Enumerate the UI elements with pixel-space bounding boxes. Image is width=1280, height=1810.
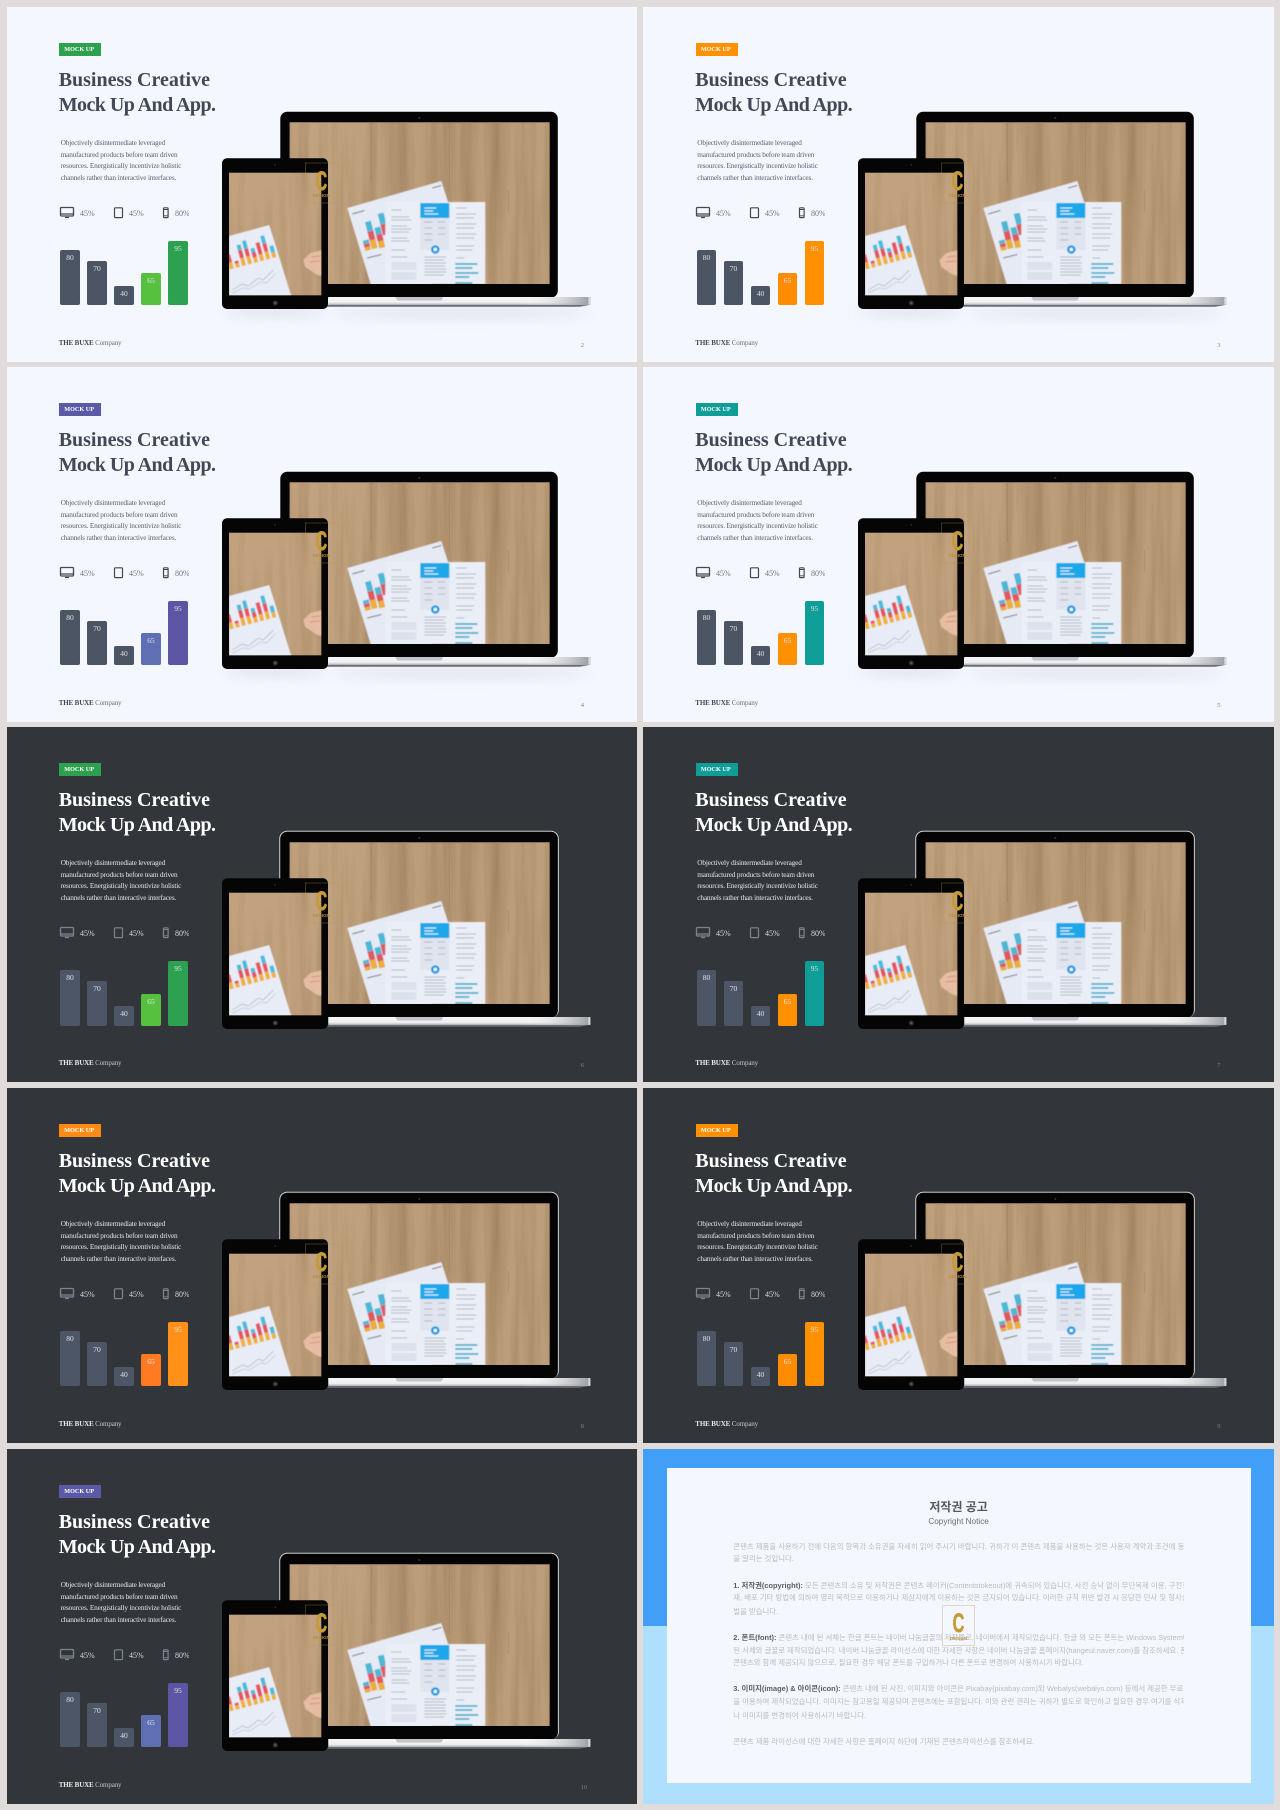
tag: MOCK UP bbox=[701, 766, 731, 773]
bar chart: 80 bbox=[66, 1334, 74, 1343]
device share icons: 45% bbox=[129, 1290, 144, 1299]
title: Business Creative bbox=[59, 69, 210, 91]
text block: channels rather than interactive interfaces. bbox=[61, 533, 176, 542]
title: Business Creative bbox=[59, 1150, 210, 1172]
tag: MOCK UP bbox=[64, 1488, 94, 1494]
device share icons bbox=[59, 1647, 189, 1663]
title bbox=[59, 1510, 216, 1560]
notice text: image and icon: 나 이미지를 변경하여 사용하시기 바랍니다. bbox=[733, 1711, 866, 1720]
tag: MOCK UP bbox=[701, 406, 731, 413]
bar chart: 95 bbox=[811, 244, 818, 253]
text block: Objectively disintermediate leveraged bbox=[61, 858, 165, 867]
text block bbox=[697, 498, 818, 542]
text block bbox=[61, 1579, 181, 1625]
bar chart: 80 bbox=[703, 613, 710, 622]
device mockup: laptop and tablet bbox=[222, 830, 590, 1029]
footer brand: THE BUXE Company bbox=[59, 1781, 121, 1789]
bar chart bbox=[7, 1318, 207, 1388]
notice heading: 저작권 공고 bbox=[929, 1500, 988, 1514]
bar chart: 65 bbox=[147, 276, 155, 285]
notice text: font bbox=[643, 1449, 1274, 1673]
panel: slide 8 dark orange-red bbox=[7, 1088, 637, 1442]
device share icons: 45% bbox=[129, 929, 144, 938]
bar chart: 40 bbox=[757, 1370, 764, 1379]
text block: resources. Energistically incentivize holistic bbox=[61, 1603, 181, 1612]
title: Mock Up And App. bbox=[59, 454, 216, 476]
title: Mock Up And App. bbox=[695, 94, 852, 116]
tag bbox=[59, 1484, 101, 1498]
tag: MOCK UP bbox=[701, 46, 731, 52]
tag: MOCK UP bbox=[64, 406, 94, 413]
text block: Objectively disintermediate leveraged bbox=[697, 138, 802, 147]
notice text: closing: 콘텐츠 제품 라이선스에 대한 자세한 사항은 홈페이지 하단에 기재된 콘텐츠라이선스를 참조하세요. bbox=[733, 1737, 1035, 1746]
bar chart: 40 bbox=[120, 649, 128, 658]
title: Business Creative bbox=[695, 789, 847, 811]
notice subheading: Copyright Notice bbox=[928, 1517, 989, 1526]
title: Mock Up And App. bbox=[59, 814, 216, 836]
footer brand: THE BUXE Company bbox=[695, 1059, 758, 1067]
bar chart: 65 bbox=[147, 636, 155, 645]
bar chart: 80 bbox=[66, 613, 74, 622]
tag bbox=[696, 763, 738, 776]
panel: slide 7 dark teal bbox=[643, 727, 1274, 1082]
text block: manufactured products before team driven bbox=[61, 870, 177, 879]
device mockup: laptop and tablet bbox=[222, 112, 590, 320]
panel: slide 6 dark green bbox=[7, 727, 637, 1082]
tag: MOCK UP bbox=[701, 1126, 731, 1134]
page number: 4 bbox=[581, 702, 584, 709]
text block: resources. Energistically incentivize holistic bbox=[697, 521, 818, 530]
text block: manufactured products before team driven bbox=[61, 1592, 177, 1600]
footer brand: THE BUXE Company bbox=[59, 339, 121, 347]
device share icons bbox=[695, 1286, 825, 1302]
footer brand: THE BUXE Company bbox=[695, 339, 758, 347]
bar chart: 80 bbox=[66, 1695, 74, 1704]
device share icons: 45% bbox=[80, 209, 95, 218]
bar chart bbox=[7, 1679, 207, 1749]
title: Mock Up And App. bbox=[59, 94, 216, 116]
page number: 3 bbox=[1217, 342, 1221, 349]
bar chart: 95 bbox=[811, 604, 818, 613]
device mockup: laptop and tablet bbox=[7, 1449, 638, 1804]
text block: manufactured products before team driven bbox=[697, 510, 814, 519]
device share icons: 45% bbox=[80, 1290, 95, 1299]
text block bbox=[60, 138, 182, 182]
bar chart: 80 bbox=[703, 973, 710, 982]
device share icons: 45% bbox=[765, 209, 780, 218]
bar chart bbox=[697, 961, 824, 1026]
page number: 7 bbox=[1217, 1062, 1221, 1069]
notice text: font: 콘텐츠와 함께 제공되지 않으므로, 필요한 경우 해당 폰트를 구입하거나 다른 폰트로 변경하여 사용하시기 바랍니다. bbox=[733, 1658, 1084, 1667]
bar chart: 65 bbox=[147, 1718, 155, 1727]
device share icons: 45% bbox=[716, 1290, 731, 1299]
text block: Objectively disintermediate leveraged bbox=[61, 1580, 165, 1589]
notice text: copyright: 벌을 받습니다. bbox=[733, 1607, 778, 1616]
device share icons: 45% bbox=[80, 929, 95, 938]
title: Business Creative bbox=[59, 1511, 210, 1533]
footer brand: THE BUXE Company bbox=[59, 699, 121, 707]
panel: slide 5 light teal bbox=[643, 367, 1274, 722]
bar chart: 65 bbox=[147, 1357, 155, 1366]
text block: resources. Energistically incentivize holistic bbox=[61, 881, 181, 890]
text block: manufactured products before team driven bbox=[61, 1230, 177, 1240]
tag bbox=[59, 42, 101, 56]
bar chart: 95 bbox=[811, 964, 818, 973]
text block: channels rather than interactive interfaces. bbox=[697, 172, 813, 182]
bar chart: 40 bbox=[757, 289, 764, 298]
text block: manufactured products before team driven bbox=[697, 870, 814, 879]
panel: slide 3 light orange bbox=[643, 7, 1274, 362]
bar chart: 70 bbox=[93, 264, 101, 273]
text block: channels rather than interactive interfaces. bbox=[61, 893, 176, 902]
device mockup: laptop and tablet bbox=[858, 112, 1226, 320]
bar chart bbox=[643, 1318, 843, 1388]
bar chart: 40 bbox=[120, 289, 128, 298]
blue upper band bbox=[643, 1449, 1274, 1626]
device share icons bbox=[60, 1288, 189, 1300]
bar chart: 65 bbox=[147, 997, 155, 1006]
text block: channels rather than interactive interfaces. bbox=[61, 172, 176, 182]
footer brand: THE BUXE Company bbox=[695, 1420, 758, 1428]
text block: Objectively disintermediate leveraged bbox=[61, 1219, 165, 1228]
title bbox=[59, 69, 216, 116]
text block: Objectively disintermediate leveraged bbox=[697, 858, 802, 867]
bar chart: 80 bbox=[703, 1334, 710, 1343]
text block: manufactured products before team driven bbox=[61, 510, 177, 519]
title: Mock Up And App. bbox=[59, 1536, 216, 1558]
title bbox=[59, 1150, 216, 1197]
text block: manufactured products before team driven bbox=[697, 1230, 814, 1240]
watermark logo: DESIGN bbox=[950, 1636, 967, 1641]
device share icons bbox=[696, 926, 825, 938]
text block bbox=[60, 498, 182, 542]
text block: resources. Energistically incentivize holistic bbox=[697, 161, 818, 170]
text block: resources. Energistically incentivize holistic bbox=[61, 521, 181, 530]
title: Mock Up And App. bbox=[695, 1175, 852, 1197]
bar chart bbox=[697, 601, 824, 665]
bar chart: 95 bbox=[174, 604, 182, 613]
notice card bbox=[667, 1468, 1251, 1783]
bar chart: 95 bbox=[811, 1325, 818, 1334]
text block: channels rather than interactive interfaces. bbox=[61, 1614, 176, 1624]
watermark logo: C bbox=[953, 1608, 965, 1638]
bar chart: 40 bbox=[120, 1370, 128, 1379]
device share icons: 45% bbox=[716, 929, 731, 938]
text block bbox=[60, 1219, 182, 1262]
text block: resources. Energistically incentivize holistic bbox=[697, 1242, 818, 1251]
device share icons bbox=[60, 926, 189, 938]
bar chart: 70 bbox=[730, 264, 737, 273]
page number: 5 bbox=[1217, 702, 1221, 709]
bar chart: 80 bbox=[66, 253, 74, 262]
panel: slide 2 light green bbox=[7, 7, 637, 362]
title bbox=[695, 789, 852, 836]
title bbox=[59, 429, 216, 476]
text block: Objectively disintermediate leveraged bbox=[61, 498, 165, 507]
text block bbox=[697, 138, 818, 182]
device share icons bbox=[60, 566, 189, 578]
footer brand: THE BUXE Company bbox=[59, 1420, 121, 1428]
text block: Objectively disintermediate leveraged bbox=[697, 1219, 802, 1228]
title: Mock Up And App. bbox=[695, 814, 852, 836]
tag bbox=[696, 1124, 738, 1137]
bar chart: 40 bbox=[757, 649, 764, 658]
device share icons: 45% bbox=[129, 1651, 144, 1660]
device share icons: 45% bbox=[129, 569, 144, 578]
watermark logo bbox=[942, 1605, 975, 1646]
bar chart: 40 bbox=[120, 1731, 128, 1740]
bar chart: 80 bbox=[703, 253, 710, 262]
bar chart: 65 bbox=[784, 1357, 791, 1366]
title: Mock Up And App. bbox=[695, 454, 852, 476]
device mockup: laptop and tablet bbox=[858, 472, 1226, 680]
tag: MOCK UP bbox=[64, 766, 94, 773]
bar chart: 40 bbox=[120, 1009, 128, 1018]
panel: slide 10 dark purple bbox=[7, 1449, 637, 1804]
tag bbox=[696, 42, 738, 56]
bar chart bbox=[60, 961, 188, 1026]
device share icons: 45% bbox=[716, 209, 731, 218]
text block: channels rather than interactive interfaces. bbox=[697, 893, 813, 902]
tag bbox=[59, 763, 101, 776]
notice text: intro bbox=[643, 1449, 1274, 1574]
bar chart: 65 bbox=[784, 636, 791, 645]
title bbox=[695, 429, 852, 476]
page number: 10 bbox=[581, 1784, 587, 1791]
tag bbox=[696, 403, 738, 416]
bar chart: 95 bbox=[174, 1686, 182, 1695]
bar chart: 65 bbox=[784, 997, 791, 1006]
title: Business Creative bbox=[695, 1150, 847, 1172]
bar chart bbox=[697, 241, 824, 305]
bar chart: 95 bbox=[174, 964, 182, 973]
device share icons: 45% bbox=[80, 569, 95, 578]
bar chart bbox=[60, 601, 188, 665]
device share icons: 45% bbox=[129, 209, 144, 218]
bar chart: 80 bbox=[66, 973, 74, 982]
title: Business Creative bbox=[59, 429, 210, 451]
bar chart: 95 bbox=[174, 1325, 182, 1334]
bar chart: 70 bbox=[93, 1706, 101, 1715]
text block: Objectively disintermediate leveraged bbox=[61, 138, 165, 147]
notice text: intro: 을 알리는 것입니다. bbox=[733, 1554, 794, 1563]
text block bbox=[697, 1218, 818, 1264]
footer brand: THE BUXE Company bbox=[59, 1059, 121, 1067]
text block: resources. Energistically incentivize holistic bbox=[697, 881, 818, 890]
title bbox=[695, 69, 852, 116]
device share icons: 45% bbox=[80, 1651, 95, 1660]
notice text: copyright bbox=[643, 1449, 1274, 1621]
device share icons: 45% bbox=[765, 1290, 780, 1299]
title: Mock Up And App. bbox=[59, 1175, 216, 1197]
title: Business Creative bbox=[695, 429, 847, 451]
tag: MOCK UP bbox=[64, 46, 94, 52]
device share icons bbox=[696, 566, 825, 578]
text block bbox=[60, 858, 182, 902]
bar chart: 70 bbox=[93, 1345, 101, 1354]
page number: 9 bbox=[1217, 1423, 1221, 1430]
panel: copyright notice bbox=[643, 1449, 1274, 1804]
bar chart: 70 bbox=[730, 984, 737, 993]
notice text: image and icon bbox=[643, 1449, 1274, 1725]
device share icons bbox=[696, 206, 825, 218]
tag bbox=[59, 1124, 101, 1137]
page number: 8 bbox=[581, 1423, 584, 1430]
bar chart: 40 bbox=[757, 1009, 764, 1018]
text block: resources. Energistically incentivize holistic bbox=[61, 161, 181, 170]
bar chart bbox=[60, 241, 188, 305]
text block: channels rather than interactive interfaces. bbox=[697, 533, 813, 542]
device share icons: 45% bbox=[765, 569, 780, 578]
bar chart: 70 bbox=[93, 984, 101, 993]
tag bbox=[59, 403, 101, 416]
panel: slide 4 light purple bbox=[7, 367, 637, 722]
panel: slide 9 dark orange bbox=[643, 1088, 1274, 1442]
device share icons bbox=[60, 206, 189, 218]
text block: channels rather than interactive interfaces. bbox=[61, 1254, 176, 1262]
notice text: copyright: 1. 저작권(copyright): 모든 콘텐츠의 소유 및 저작권은 콘텐츠 메이커(Contentstokeout)에 귀속되어 있습니다. 사전 승낙 없이 무단복제 이용, 구전전 bbox=[733, 1581, 1184, 1590]
device mockup: laptop and tablet bbox=[643, 1088, 1274, 1443]
bar chart: 70 bbox=[730, 1345, 737, 1354]
text block: manufactured products before team driven bbox=[61, 150, 177, 158]
text block: manufactured products before team driven bbox=[697, 150, 814, 158]
page number: 6 bbox=[581, 1062, 584, 1069]
title bbox=[59, 789, 216, 836]
device mockup: laptop and tablet bbox=[222, 1192, 590, 1390]
title bbox=[695, 1149, 852, 1199]
bar chart: 65 bbox=[784, 276, 791, 285]
footer brand: THE BUXE Company bbox=[695, 699, 758, 707]
text block: resources. Energistically incentivize holistic bbox=[61, 1242, 181, 1251]
title: Business Creative bbox=[695, 69, 847, 91]
page number: 2 bbox=[581, 342, 584, 349]
bar chart: 95 bbox=[174, 244, 182, 253]
device mockup: laptop and tablet bbox=[222, 472, 590, 680]
text block bbox=[697, 858, 818, 902]
device share icons: 45% bbox=[716, 569, 731, 578]
device share icons: 45% bbox=[765, 929, 780, 938]
bar chart: 70 bbox=[730, 624, 737, 633]
bar chart: 70 bbox=[93, 624, 101, 633]
title: Business Creative bbox=[59, 789, 210, 811]
text block: Objectively disintermediate leveraged bbox=[697, 498, 802, 507]
device mockup: laptop and tablet bbox=[858, 830, 1226, 1029]
text block: channels rather than interactive interfaces. bbox=[697, 1254, 813, 1262]
tag: MOCK UP bbox=[64, 1126, 94, 1134]
